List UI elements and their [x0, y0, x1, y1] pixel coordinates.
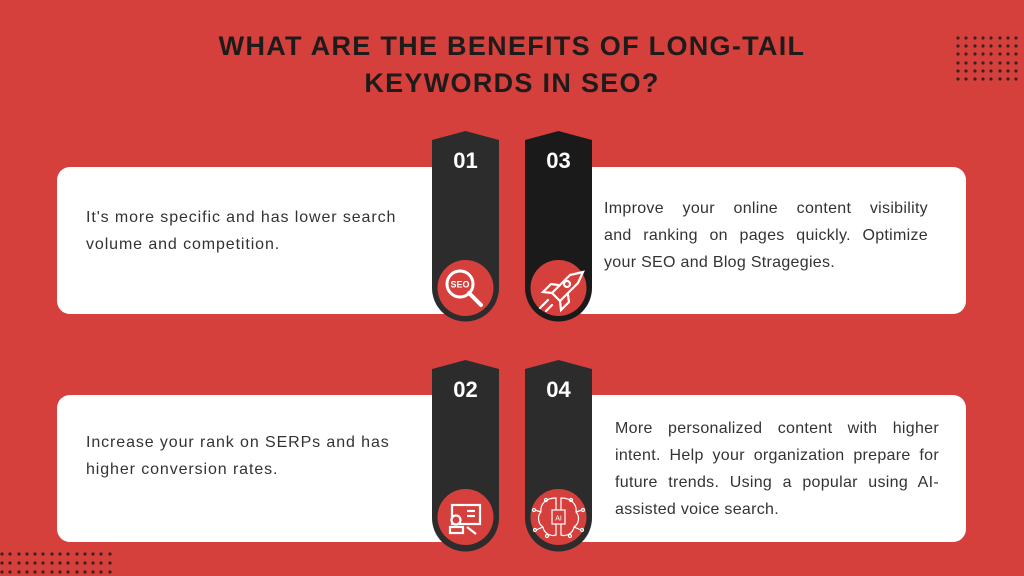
- card 2: [57, 395, 457, 542]
- text 4: intent. Help your organization prepare for: [615, 447, 939, 464]
- pill 02: 02: [453, 377, 478, 402]
- text 3: [604, 200, 928, 271]
- text 2: higher conversion rates.: [86, 461, 278, 478]
- icon: presentation: [438, 489, 494, 545]
- text 2: [86, 434, 390, 478]
- card 4: [570, 395, 966, 542]
- pill 02: [432, 360, 499, 552]
- card 3: [570, 167, 966, 314]
- icon: AI brain: AI: [555, 516, 562, 522]
- text 2: Increase your rank on SERPs and has: [86, 434, 390, 451]
- icon: SEO magnifier: SEO: [450, 280, 470, 290]
- title: [218, 31, 805, 98]
- text 3: your SEO and Blog Stragegies.: [604, 254, 835, 271]
- text 4: assisted voice search.: [615, 501, 779, 518]
- icon: AI brain: [530, 489, 586, 545]
- pill 03: 03: [546, 148, 571, 173]
- text 1: volume and competition.: [86, 236, 280, 253]
- text 3: and ranking on pages quickly. Optimize: [604, 227, 928, 244]
- text 3: Improve your online content visibility: [604, 200, 928, 217]
- card 1: [57, 167, 457, 314]
- text 4: More personalized content with higher: [615, 420, 939, 437]
- title: WHAT ARE THE BENEFITS OF LONG-TAIL: [219, 31, 805, 61]
- pill 04: [525, 360, 592, 552]
- icon: SEO magnifier: [438, 260, 494, 316]
- text 4: future trends. Using a popular using AI-: [615, 474, 939, 491]
- pill 03: [525, 131, 592, 321]
- title: KEYWORDS IN SEO?: [364, 68, 660, 98]
- text 4: [615, 420, 939, 518]
- text 1: [86, 209, 396, 253]
- text 1: It's more specific and has lower search: [86, 209, 396, 226]
- pill 01: [432, 131, 499, 321]
- pill 01: 01: [453, 148, 478, 173]
- pill 04: 04: [546, 377, 571, 402]
- icon: rocket: [530, 260, 586, 316]
